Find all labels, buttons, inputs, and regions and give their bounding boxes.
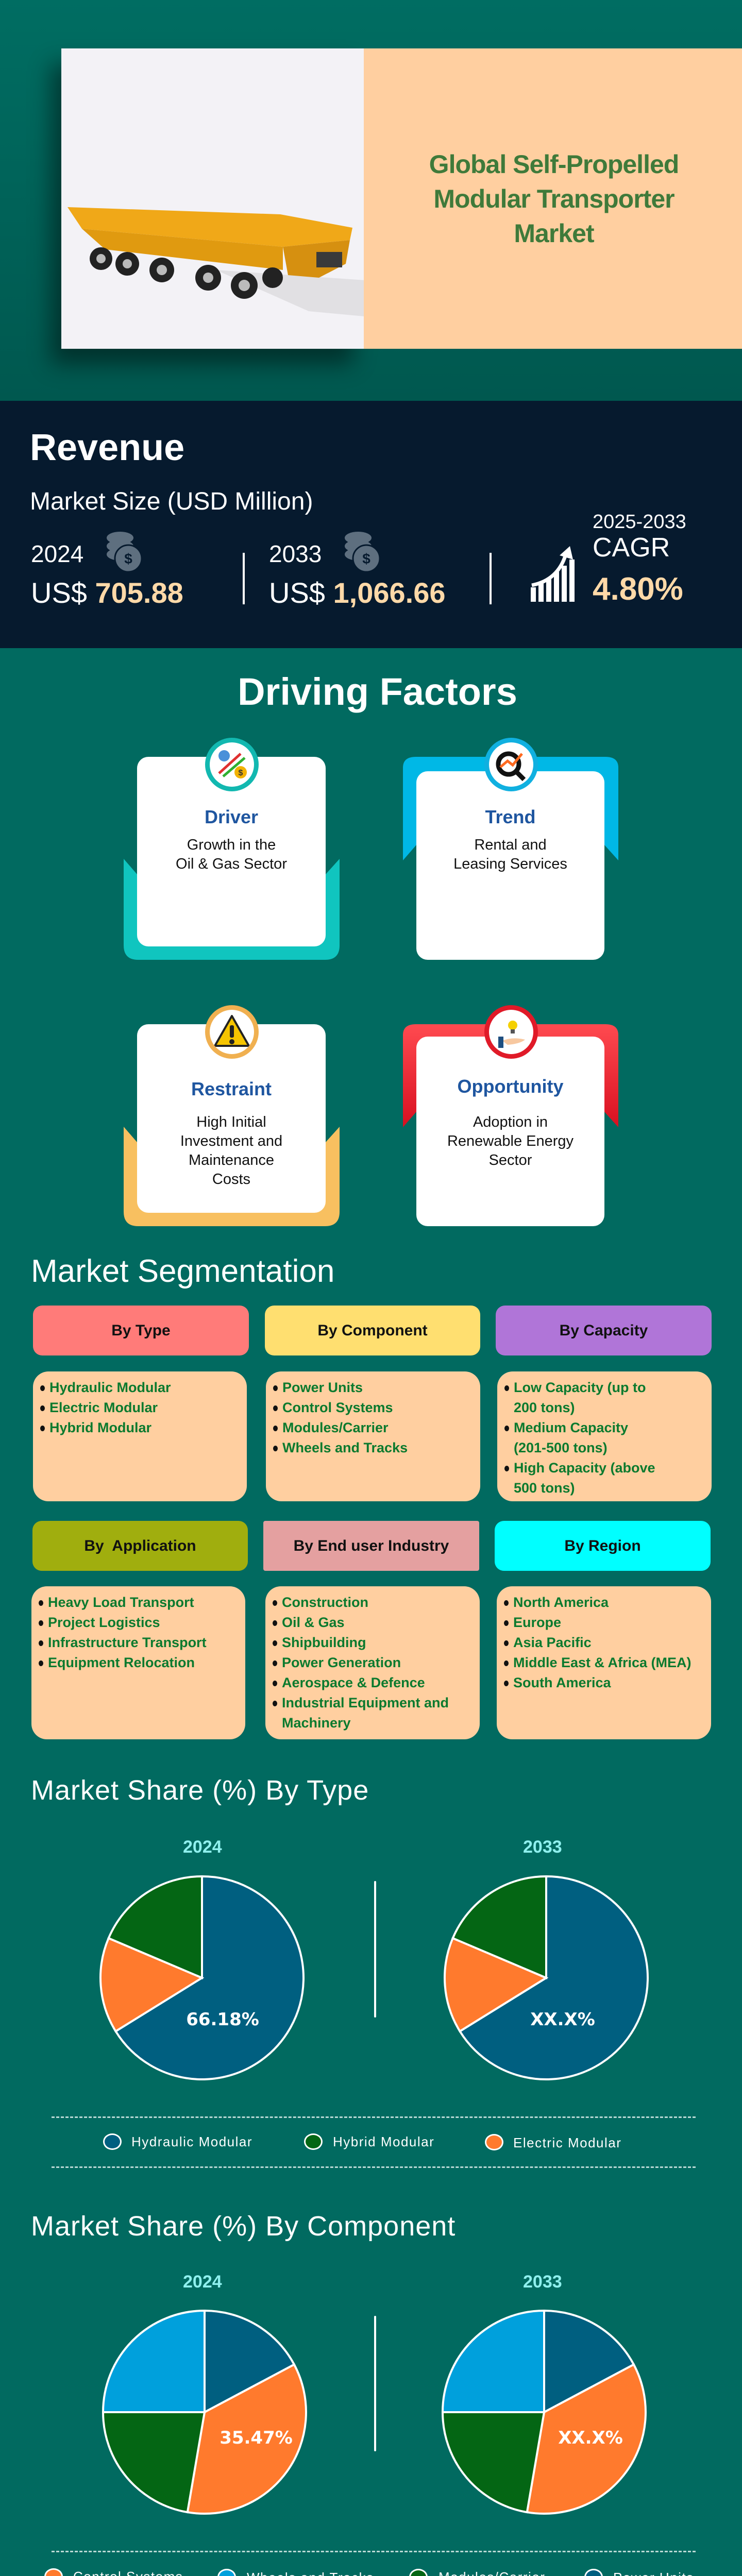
card: driver [124, 738, 340, 960]
pie: type 2033 [444, 1875, 649, 2080]
seg list: capacity: High Capacity (above [514, 1460, 655, 1476]
icon: coins: $ [124, 551, 132, 567]
icon: coins [345, 532, 379, 571]
trend title: Trend [485, 806, 536, 827]
year label: 2033 [523, 2272, 562, 2292]
title [429, 150, 679, 248]
seg: by region: By Region [564, 1537, 641, 1554]
CAGR: 2025-2033 [593, 511, 686, 533]
seg list: component: Modules/Carrier [282, 1420, 389, 1435]
legend: type: Hydraulic Modular [131, 2134, 252, 2149]
restraint title: Restraint [191, 1078, 272, 1099]
divider [243, 553, 245, 604]
opportunity text [447, 1114, 574, 1168]
seg list: type [33, 1371, 247, 1501]
restraint text [180, 1114, 282, 1188]
2024 value: US$ 705.88 [31, 577, 183, 609]
trend text [453, 837, 567, 872]
divider [374, 2316, 376, 2451]
seg list: application [31, 1586, 245, 1739]
restraint text: Costs [212, 1171, 250, 1188]
driver text: Growth in the [187, 837, 276, 853]
seg list: end user: Shipbuilding [282, 1635, 366, 1650]
opportunity text: Adoption in [473, 1114, 548, 1130]
seg list: region: South America [513, 1675, 611, 1690]
seg list: end user [265, 1586, 480, 1739]
seg list: region: Asia Pacific [513, 1635, 592, 1650]
seg list: end user: Machinery [282, 1715, 351, 1731]
seg: by application: By Application [84, 1537, 196, 1554]
legend: type [52, 2116, 696, 2168]
pie: component 2024 [102, 2310, 307, 2515]
seg: by end user: By End user Industry [294, 1537, 449, 1554]
seg list: end user: Power Generation [282, 1655, 401, 1670]
transporter illustration [68, 207, 364, 316]
seg list: capacity: Low Capacity (up to [514, 1380, 646, 1395]
trend text: Leasing Services [453, 856, 567, 872]
year label: 2024 [183, 1837, 222, 1857]
card: trend [403, 738, 618, 960]
title: share by component: Market Share (%) By Component [31, 2211, 456, 2242]
title panel [364, 48, 742, 349]
seg: by component: By Component [317, 1322, 428, 1338]
year label: 2024 [183, 2272, 222, 2292]
seg list: capacity: Medium Capacity [514, 1420, 628, 1435]
seg list: component: Control Systems [282, 1400, 393, 1415]
seg list: end user: Construction [282, 1595, 368, 1610]
seg list: type: Electric Modular [49, 1400, 158, 1415]
card: opportunity [403, 1005, 618, 1226]
trend text: Rental and [474, 837, 547, 853]
seg list: region [497, 1586, 711, 1739]
title: Market [514, 219, 594, 248]
seg list: application: Heavy Load Transport [48, 1595, 194, 1610]
legend: type: Hybrid Modular [333, 2134, 434, 2149]
2033 value [269, 532, 445, 609]
icon: coins [107, 532, 141, 571]
seg list: capacity: 500 tons) [514, 1480, 575, 1496]
opportunity text: Renewable Energy [447, 1133, 574, 1149]
pie: component 2024: 35.47% [220, 2428, 293, 2448]
divider [490, 553, 492, 604]
restraint text: Investment and [180, 1133, 282, 1149]
hero background [0, 0, 742, 401]
hero image panel [61, 48, 364, 349]
seg list: end user: Industrial Equipment and [282, 1695, 449, 1710]
seg list: type: Hybrid Modular [49, 1420, 151, 1435]
pie: component 2033 [442, 2310, 647, 2515]
icon: coins: $ [362, 551, 370, 567]
seg list: region: Middle East & Africa (MEA) [513, 1655, 692, 1670]
seg list: application: Equipment Relocation [48, 1655, 195, 1670]
seg: by type [33, 1306, 249, 1355]
icon: growth chart [531, 546, 575, 602]
opportunity text: Sector [489, 1152, 532, 1168]
icon: driver: $ [239, 769, 243, 777]
legend: component [52, 2551, 696, 2576]
seg: by end user [263, 1521, 479, 1571]
CAGR [593, 511, 686, 563]
seg: by region [495, 1521, 711, 1571]
2024 value: 2024 [31, 540, 83, 567]
seg list: capacity: (201-500 tons) [514, 1440, 608, 1455]
icon: opportunity [484, 1005, 538, 1059]
pie: component 2033: XX.X% [558, 2428, 623, 2448]
seg: by capacity [496, 1306, 712, 1355]
seg list: application: Project Logistics [48, 1615, 160, 1630]
seg list: component: Power Units [282, 1380, 363, 1395]
driver text [176, 837, 287, 872]
pie: type 2024 [99, 1875, 305, 2080]
divider [374, 1881, 376, 2018]
restraint text: High Initial [196, 1114, 266, 1130]
seg list: component: Wheels and Tracks [282, 1440, 408, 1455]
legend: type: Electric Modular [513, 2135, 621, 2150]
revenue heading: Revenue [30, 427, 184, 468]
seg list: component [266, 1371, 480, 1501]
seg list: region: North America [513, 1595, 609, 1610]
seg list: end user: Oil & Gas [282, 1615, 345, 1630]
icon: driver [205, 738, 259, 791]
seg list: region: Europe [513, 1615, 561, 1630]
seg: by type: By Type [111, 1322, 171, 1338]
market size label: Market Size (USD Million) [30, 488, 313, 515]
title: share by type: Market Share (%) By Type [31, 1775, 369, 1806]
year label: 2033 [523, 1837, 562, 1857]
pie: type 2033: XX.X% [530, 2009, 595, 2030]
seg: by component [265, 1306, 480, 1355]
driving factors title: Driving Factors [238, 670, 517, 713]
segmentation title: Market Segmentation [31, 1253, 334, 1289]
seg list: application: Infrastructure Transport [48, 1635, 207, 1650]
2024 value [31, 532, 183, 609]
icon: trend [484, 738, 538, 791]
card: restraint [124, 1005, 340, 1226]
revenue section [0, 401, 742, 648]
2033 value: 2033 [269, 540, 322, 567]
seg list: capacity: 200 tons) [514, 1400, 575, 1415]
pie: type 2024: 66.18% [186, 2009, 259, 2030]
seg: by application [32, 1521, 248, 1571]
seg list: end user: Aerospace & Defence [282, 1675, 425, 1690]
revenue section: 4.80% [593, 571, 683, 607]
title: Global Self-Propelled [429, 150, 679, 179]
CAGR: CAGR [593, 533, 670, 563]
2033 value: US$ 1,066.66 [269, 577, 445, 609]
driver title: Driver [205, 806, 258, 827]
icon: warning [205, 1005, 259, 1059]
seg: by capacity: By Capacity [560, 1322, 648, 1338]
title: Modular Transporter [433, 184, 674, 213]
seg list: capacity [497, 1371, 712, 1501]
restraint text: Maintenance [189, 1152, 274, 1168]
opportunity title: Opportunity [458, 1076, 563, 1097]
driver text: Oil & Gas Sector [176, 856, 287, 872]
seg list: type: Hydraulic Modular [49, 1380, 171, 1395]
